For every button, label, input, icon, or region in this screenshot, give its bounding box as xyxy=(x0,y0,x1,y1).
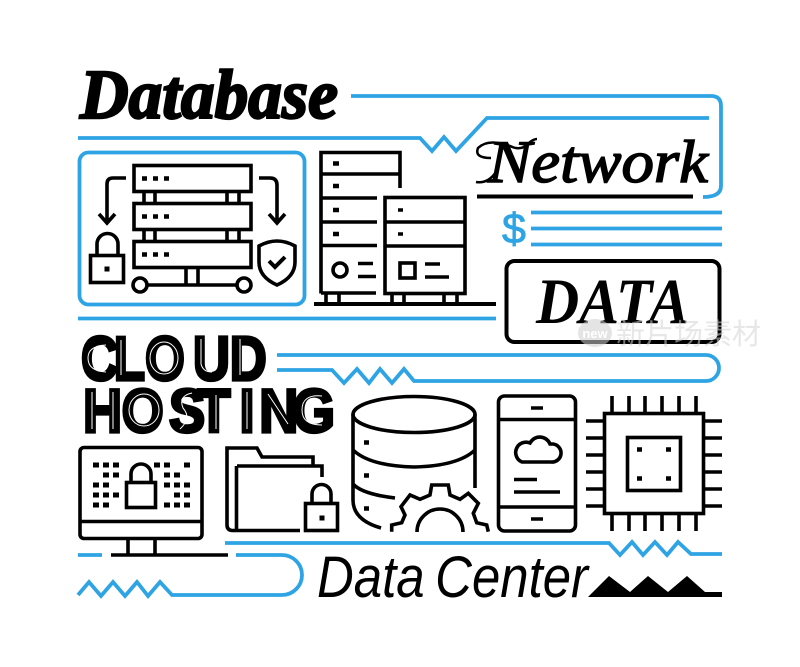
network underline xyxy=(477,194,693,198)
panel: DATA label: DATA xyxy=(535,266,689,338)
blue connector: rounded loop with zigzag xyxy=(277,355,719,383)
blue connector: top right frame xyxy=(351,96,721,197)
blue divider under panels xyxy=(78,317,496,320)
icon: arrow left down xyxy=(99,178,126,223)
title: Database: Database xyxy=(79,57,338,134)
watermark: new xyxy=(582,326,609,341)
icon: server stack xyxy=(133,166,251,292)
icon: monitor with lock xyxy=(80,448,228,555)
icon: database with gear xyxy=(353,396,488,532)
icon: smartphone with cloud xyxy=(498,396,576,531)
blue dash xyxy=(78,553,102,557)
blue connector: zigzag under title xyxy=(78,118,709,151)
icon: shield check xyxy=(259,241,295,285)
padlock on screen xyxy=(126,464,156,508)
heading: Data Center: Data Center xyxy=(317,545,590,610)
data dots xyxy=(93,462,190,508)
gear xyxy=(392,485,488,532)
heading: Network: Network xyxy=(487,129,709,195)
heading: Cloud Hosting: CLOUD xyxy=(81,324,267,394)
heading: Cloud Hosting: HOSTING xyxy=(83,378,335,446)
cloud xyxy=(516,437,561,462)
icon: microchip xyxy=(586,396,722,531)
icon: folder with lock xyxy=(227,448,338,530)
blue connector: lower zigzag xyxy=(225,542,722,555)
icon: dollar sign with lines: $ xyxy=(502,205,526,253)
icon: arrow right down xyxy=(259,178,285,223)
heading: Cloud Hosting xyxy=(81,324,335,446)
blue connector: bottom loop with zigzag xyxy=(78,555,302,596)
decorative mountains xyxy=(588,576,722,597)
panel: DATA label xyxy=(506,261,720,342)
panel: secure server rack xyxy=(80,152,304,304)
icon: dollar sign with lines xyxy=(502,205,722,253)
icon: padlock xyxy=(90,234,124,282)
icon: server towers xyxy=(314,152,496,304)
watermark: 新片场素材 xyxy=(616,311,761,353)
